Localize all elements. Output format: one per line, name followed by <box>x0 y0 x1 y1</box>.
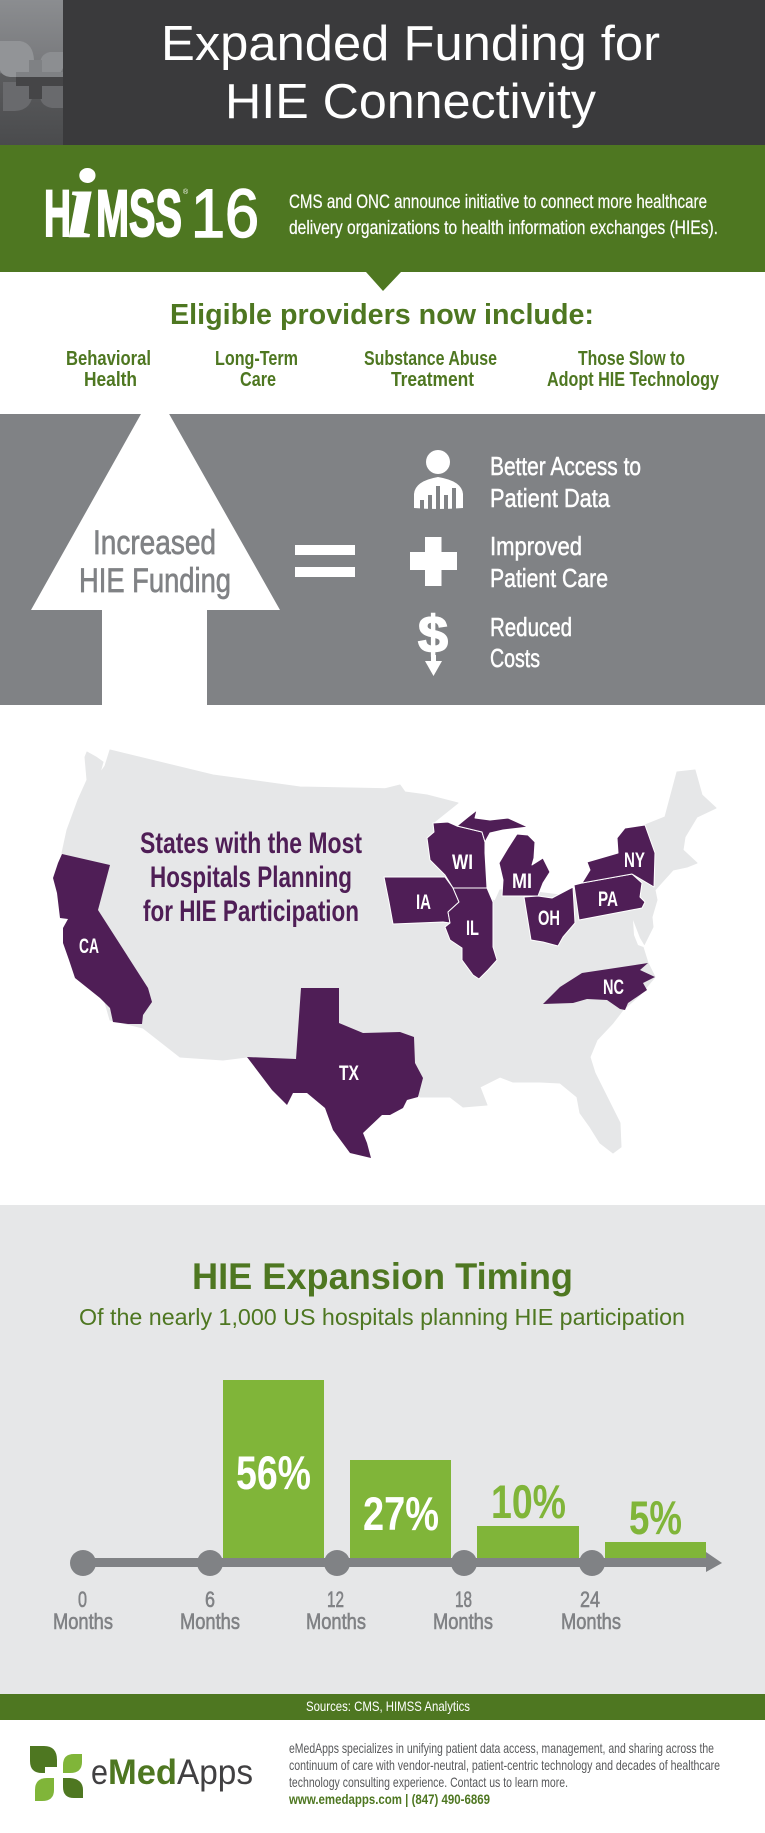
title: HIE Connectivity <box>225 75 596 129</box>
icon: medical plus <box>410 537 457 586</box>
map: state labels: OH <box>538 907 560 930</box>
HIMSS16 logo: ® <box>183 188 189 196</box>
announcement text <box>289 192 718 239</box>
timeline labels: 12 <box>327 1587 344 1612</box>
map title: States with the Most <box>140 827 362 860</box>
sources bar <box>0 1694 765 1720</box>
bar: 6-12 months <box>223 1380 324 1558</box>
state: Wisconsin <box>427 822 487 888</box>
icon: patient data <box>414 450 463 509</box>
bar: over 24 months: 5% <box>629 1491 682 1544</box>
timing heading: HIE Expansion Timing <box>192 1256 573 1297</box>
state: California <box>53 854 152 1024</box>
company description: technology consulting experience. Contact us to learn more. <box>289 1774 568 1790</box>
bar: 12-18 months <box>350 1460 451 1558</box>
green announcement band <box>0 145 765 291</box>
US map <box>53 750 716 1158</box>
map: state labels: CA <box>79 935 99 958</box>
bar: 12-18 months: 27% <box>363 1487 439 1540</box>
eMedApps logo: Med <box>108 1753 177 1792</box>
map: state labels: MI <box>512 870 532 893</box>
bar: over 24 months <box>605 1491 706 1558</box>
map: state labels <box>79 849 645 1085</box>
benefit: better access: Patient Data <box>490 483 610 513</box>
sources bar: Sources: CMS, HIMSS Analytics <box>306 1698 470 1714</box>
provider: long-term care <box>215 348 298 391</box>
timeline labels: Months <box>180 1609 240 1634</box>
timeline labels: 6 <box>205 1587 215 1612</box>
state: Iowa <box>384 877 459 924</box>
arrow: increased HIE funding: Increased <box>93 524 216 562</box>
benefit: reduced costs: Reduced <box>490 612 572 642</box>
provider: behavioral health: Health <box>84 369 137 391</box>
map title <box>140 827 362 928</box>
benefit: better access: Better Access to <box>490 451 641 481</box>
eMedApps logo <box>30 1746 253 1801</box>
map: state labels: IL <box>466 917 479 940</box>
bar: 18-24 months: 10% <box>491 1475 566 1528</box>
timeline axis <box>70 1550 722 1576</box>
provider: slow adopters <box>547 348 720 391</box>
heading: eligible providers: Eligible providers now include: <box>170 299 594 331</box>
benefit: improved care: Patient Care <box>490 563 608 593</box>
state: Michigan <box>457 810 550 896</box>
header band <box>0 0 765 145</box>
benefit: improved care: Improved <box>490 531 582 561</box>
HIMSS16 logo <box>44 148 259 259</box>
HIMSS16 logo: H <box>44 176 71 250</box>
benefit: reduced costs <box>490 612 572 673</box>
map: highlighted states <box>53 810 655 1158</box>
timeline labels: Months <box>53 1609 113 1634</box>
provider: long-term care: Long-Term <box>215 348 298 370</box>
map title: Hospitals Planning <box>150 861 352 894</box>
timeline labels: Months <box>433 1609 493 1634</box>
timeline labels: Months <box>561 1609 621 1634</box>
state: North Carolina <box>543 963 655 1010</box>
bar: 6-12 months: 56% <box>236 1446 311 1499</box>
map title: for HIE Participation <box>143 895 359 928</box>
equals sign <box>295 545 355 577</box>
provider list <box>66 348 720 391</box>
map: state labels: NY <box>624 849 645 872</box>
timeline labels: 0 <box>78 1587 87 1612</box>
map: state labels: WI <box>452 851 473 874</box>
timeline labels: 24 <box>580 1587 600 1612</box>
state: Illinois <box>445 888 497 979</box>
HIMSS16 logo: i <box>66 148 96 259</box>
eMedApps logo: e <box>91 1753 108 1792</box>
state: Ohio <box>524 887 575 946</box>
title: Expanded Funding for <box>161 17 660 71</box>
provider: slow adopters: Those Slow to <box>578 348 685 370</box>
provider: substance abuse treatment: Treatment <box>391 369 474 391</box>
state: Texas <box>247 988 423 1158</box>
title <box>161 17 660 129</box>
arrow: increased HIE funding <box>31 389 280 706</box>
panel: expansion timing <box>0 1205 765 1694</box>
HIMSS16 logo: 16 <box>191 175 259 252</box>
bar: 18-24 months <box>477 1475 579 1558</box>
HIMSS16 logo: MSS <box>96 176 182 250</box>
bar chart <box>223 1380 706 1558</box>
provider: substance abuse treatment <box>364 348 497 391</box>
decorative logo square <box>0 0 63 145</box>
provider: long-term care: Care <box>240 369 276 391</box>
provider: behavioral health: Behavioral <box>66 348 151 370</box>
eMedApps logo: Apps <box>177 1753 253 1792</box>
provider: behavioral health <box>66 348 151 391</box>
icon: reduced dollar: $ <box>418 606 448 664</box>
benefit: improved care <box>490 531 608 593</box>
map: state labels: NC <box>603 976 624 999</box>
timing subtitle: Of the nearly 1,000 US hospitals planning HIE participation <box>79 1304 685 1330</box>
state: Pennsylvania <box>574 874 645 920</box>
benefit: better access <box>490 451 641 513</box>
company description <box>288 1740 720 1807</box>
company description: www.emedapps.com | (847) 490-6869 <box>288 1791 490 1807</box>
map: state labels: TX <box>339 1062 359 1085</box>
arrow: increased HIE funding: HIE Funding <box>79 562 231 600</box>
timeline labels: 18 <box>455 1587 472 1612</box>
provider: slow adopters: Adopt HIE Technology <box>547 369 720 391</box>
timeline labels <box>53 1587 621 1634</box>
map: land silhouette <box>62 750 716 1153</box>
map: state labels: IA <box>416 891 431 914</box>
state: New York <box>582 825 655 887</box>
map: state labels: PA <box>598 888 618 911</box>
panel: funding equation <box>0 389 765 706</box>
benefit: reduced costs: Costs <box>490 643 540 673</box>
timeline labels: Months <box>306 1609 366 1634</box>
provider: substance abuse treatment: Substance Abuse <box>364 348 497 370</box>
